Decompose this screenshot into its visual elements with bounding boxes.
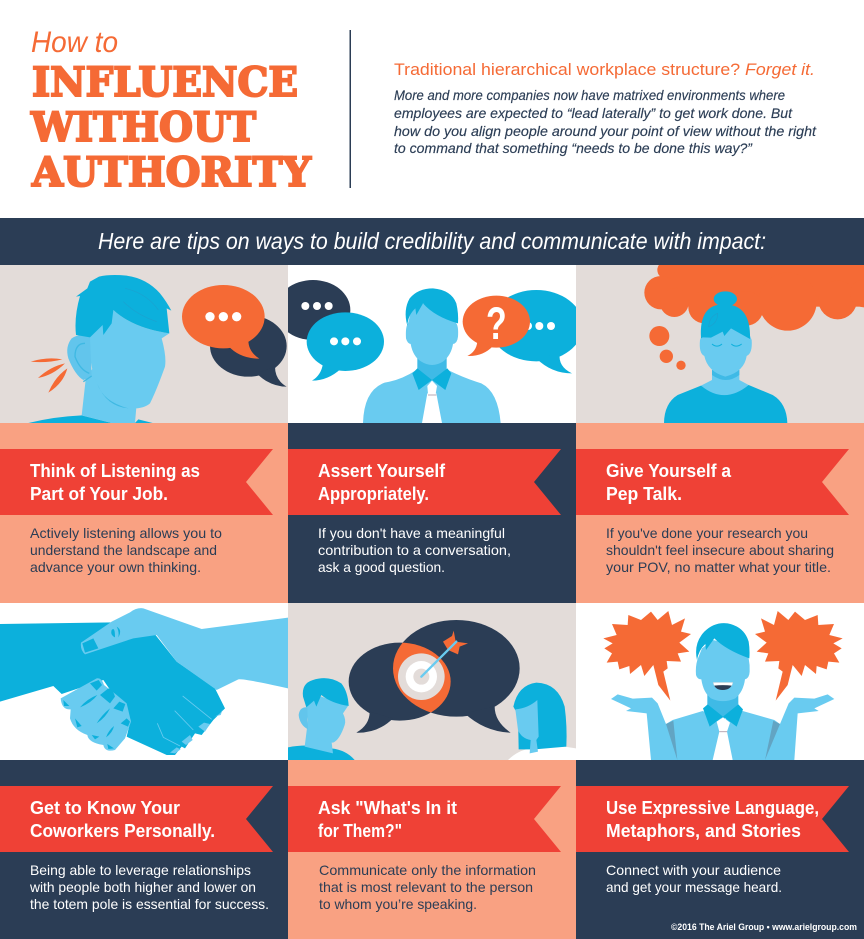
heading: [30, 798, 215, 841]
heading: Use Expressive Language,: [606, 798, 819, 818]
body text: with people both higher and lower on: [29, 879, 256, 895]
icon: arrow: [421, 631, 468, 677]
heading: [318, 461, 446, 504]
without: WITHOUT: [30, 104, 256, 151]
intro body: More and more companies now have matrixed environments where: [394, 87, 785, 103]
heading: Coworkers Personally.: [30, 821, 215, 841]
authority: AUTHORITY: [31, 149, 311, 196]
ribbon: [0, 449, 273, 515]
panel: tip 3 pep talk: [576, 423, 864, 603]
body text: Actively listening allows you to: [30, 525, 222, 541]
body text: understand the landscape and: [30, 542, 217, 558]
influence: INFLUENCE: [32, 59, 298, 106]
icon: left navy bubble: [348, 642, 431, 733]
heading: [606, 798, 819, 841]
header title: [30, 26, 311, 196]
heading: [606, 461, 732, 504]
icon: right burst: [755, 611, 843, 701]
heading: Metaphors, and Stories: [606, 821, 801, 841]
heading: Appropriately.: [318, 484, 429, 504]
panel: tip 4 coworkers: [0, 760, 288, 939]
how to: How to: [31, 26, 118, 59]
body text: [606, 862, 782, 895]
ribbon: [576, 449, 849, 515]
icon: orange speech bubble: [182, 285, 265, 359]
icon: right navy bubble: [393, 620, 520, 733]
icon: dark forearm and hand: [0, 622, 225, 755]
icon: question bubble: ?: [486, 298, 507, 349]
icon: sound marks: [31, 358, 67, 393]
icon: light forearm and thumb: [81, 608, 288, 690]
ribbon: [288, 786, 561, 852]
tips banner: [0, 218, 864, 265]
body text: [606, 525, 834, 575]
heading: Pep Talk.: [606, 484, 682, 504]
icon: thought dots: [649, 326, 686, 370]
icon: woman: [508, 683, 576, 760]
body text: [30, 525, 222, 575]
heading: for Them?": [318, 821, 402, 841]
panel: expressive language illustration: [604, 611, 842, 760]
body text: [318, 525, 511, 575]
icon: knuckle tips: [170, 709, 223, 753]
panel: tip 6 expressive language: [576, 760, 864, 939]
icon: businessman: [363, 288, 501, 423]
heading: Assert Yourself: [318, 461, 446, 481]
intro body: how do you align people around your point of view without the right: [394, 123, 817, 139]
panel: tip 5 what's in it: [288, 760, 576, 939]
body text: [319, 862, 536, 912]
body text: If you've done your research you: [606, 525, 808, 541]
icon: finger creases and nails: [63, 680, 130, 749]
body text: [29, 862, 269, 912]
icon: woman with closed eyes: [664, 291, 787, 423]
body text: your POV, no matter what your title.: [606, 559, 831, 575]
body text: advance your own thinking.: [30, 559, 201, 575]
intro body: to command that something “needs to be done this way?”: [394, 140, 753, 156]
icon: man with raised hands: [611, 623, 834, 760]
heading: Get to Know Your: [30, 798, 180, 818]
body text: shouldn't feel insecure about sharing: [606, 542, 834, 558]
panel: handshake illustration: [0, 603, 288, 760]
tips banner: Here are tips on ways to build credibility and communicate with impact:: [98, 228, 766, 254]
panel: assert yourself illustration: [288, 280, 576, 423]
icon: listener head: [67, 275, 171, 423]
ribbon: [0, 786, 273, 852]
body text: Being able to leverage relationships: [30, 862, 251, 878]
heading: Part of Your Job.: [30, 484, 168, 504]
icon: target: [398, 653, 445, 700]
panel: listening illustration: [0, 265, 288, 423]
panel: tip 1 listening: [0, 423, 288, 603]
copyright: ©2016 The Ariel Group • www.arielgroup.com: [671, 922, 857, 932]
panel: what's in it illustration: [288, 603, 576, 760]
icon: navy speech bubble: [210, 315, 287, 387]
body text: contribution to a conversation,: [318, 542, 511, 558]
icon: man: [288, 678, 355, 760]
heading: Think of Listening as: [30, 461, 200, 481]
introduction text block: [394, 60, 817, 156]
body text: to whom you’re speaking.: [319, 896, 477, 912]
icon: orange overlap: [393, 642, 451, 712]
icon: listener shoulders: [28, 415, 153, 423]
icon: thumbnail and thumb creases: [82, 627, 120, 653]
icon: fingers: [61, 678, 131, 751]
ribbon: [288, 449, 561, 515]
icon: thought cloud: [644, 261, 864, 331]
heading: [318, 798, 457, 841]
icon: navy speech bubble: [288, 280, 350, 340]
heading: [30, 461, 200, 504]
heading: Give Yourself a: [606, 461, 732, 481]
body text: that is most relevant to the person: [319, 879, 533, 895]
body text: Connect with your audience: [606, 862, 781, 878]
intro body: [394, 87, 817, 156]
icon: knuckle marks: [157, 696, 212, 746]
icon: left burst: [603, 611, 691, 701]
panel: tip 2 assert: [288, 423, 576, 603]
heading: Ask "What's In it: [318, 798, 457, 818]
intro heading: Traditional hierarchical workplace structure? Forget it.: [394, 60, 815, 79]
body text: ask a good question.: [318, 559, 445, 575]
body text: and get your message heard.: [606, 879, 782, 895]
icon: blue speech bubble right: [500, 290, 576, 374]
body text: If you don't have a meaningful: [318, 525, 505, 541]
panel: pep talk illustration: [576, 261, 864, 423]
intro body: employees are expected to “lead laterally” to get work done. But: [394, 105, 793, 121]
icon: blue speech bubble left: [307, 312, 384, 381]
body text: the totem pole is essential for success.: [30, 896, 269, 912]
ribbon: [576, 786, 849, 852]
icon: question bubble: [463, 296, 530, 356]
body text: Communicate only the information: [319, 862, 536, 878]
